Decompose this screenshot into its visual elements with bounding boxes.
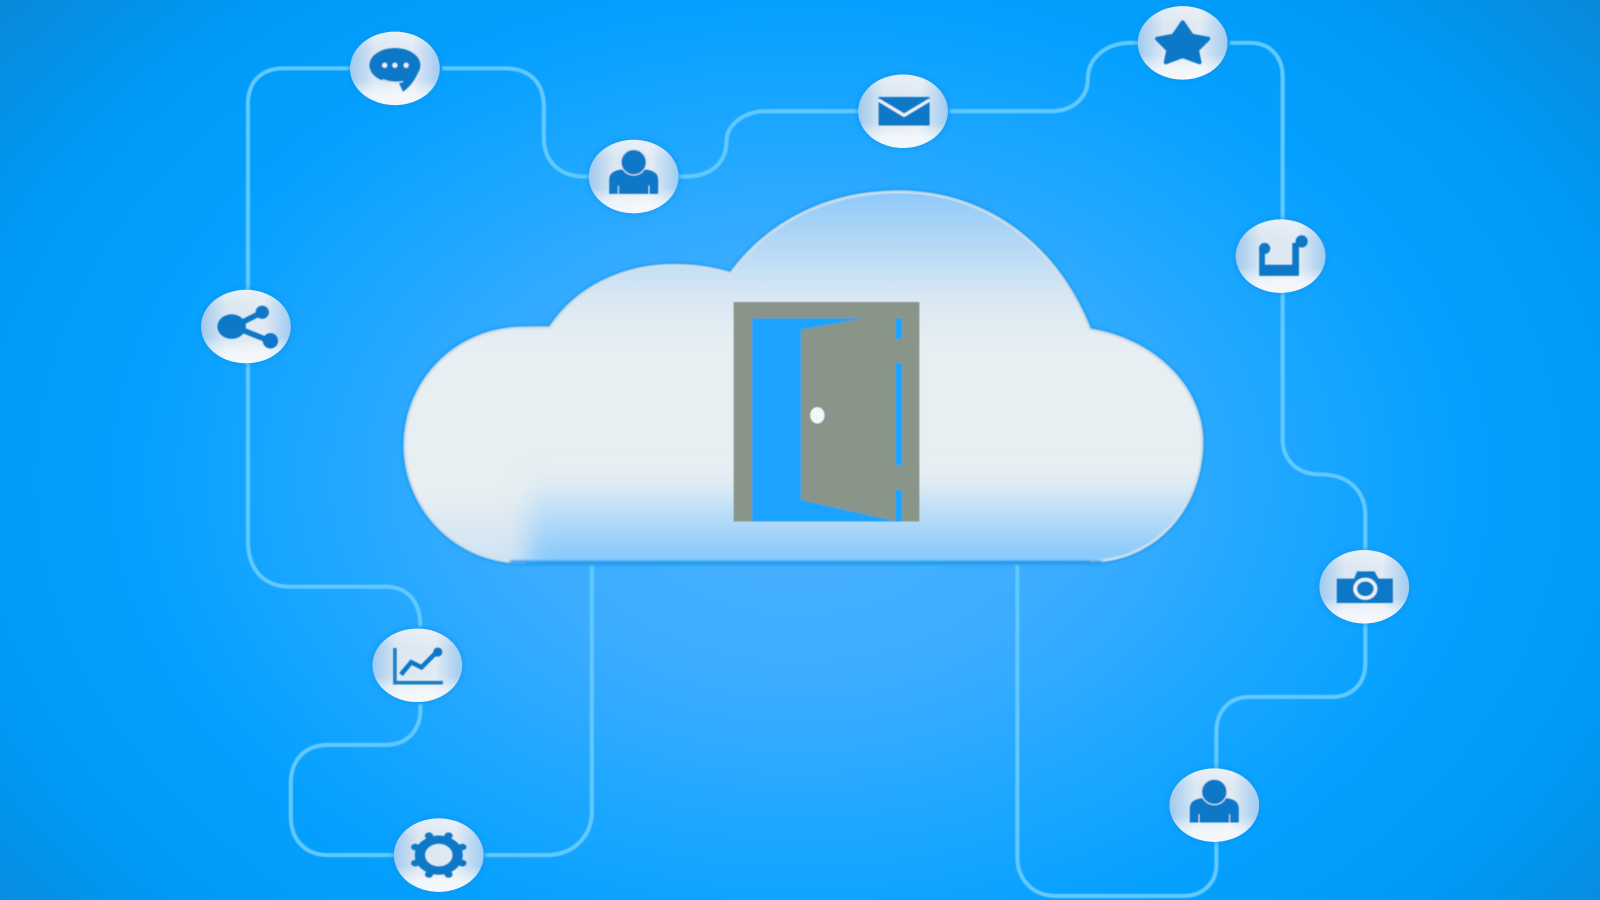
door opening: [752, 318, 897, 521]
cloud shadow: [405, 192, 1202, 562]
node: music: [1234, 217, 1328, 295]
node: star: [1136, 4, 1230, 82]
door: [734, 302, 919, 521]
node: mail: [856, 72, 950, 150]
connector lines: [248, 43, 1365, 896]
node: chat: [348, 30, 442, 107]
node: share: [199, 288, 293, 365]
node: user top: [587, 138, 681, 215]
cloud body: [405, 192, 1202, 562]
cloud: [405, 192, 1263, 577]
cloud bottom shade: [514, 480, 1194, 562]
node: camera: [1317, 548, 1411, 626]
cloud base edge: [510, 560, 1102, 564]
node: gear: [392, 816, 486, 894]
door hinge gaps: [895, 318, 902, 521]
node: chart: [370, 627, 464, 704]
node: user bottom: [1167, 766, 1261, 844]
cloud rim: [405, 192, 1202, 562]
door knob: [810, 407, 824, 423]
door frame and leaf: [734, 302, 919, 521]
